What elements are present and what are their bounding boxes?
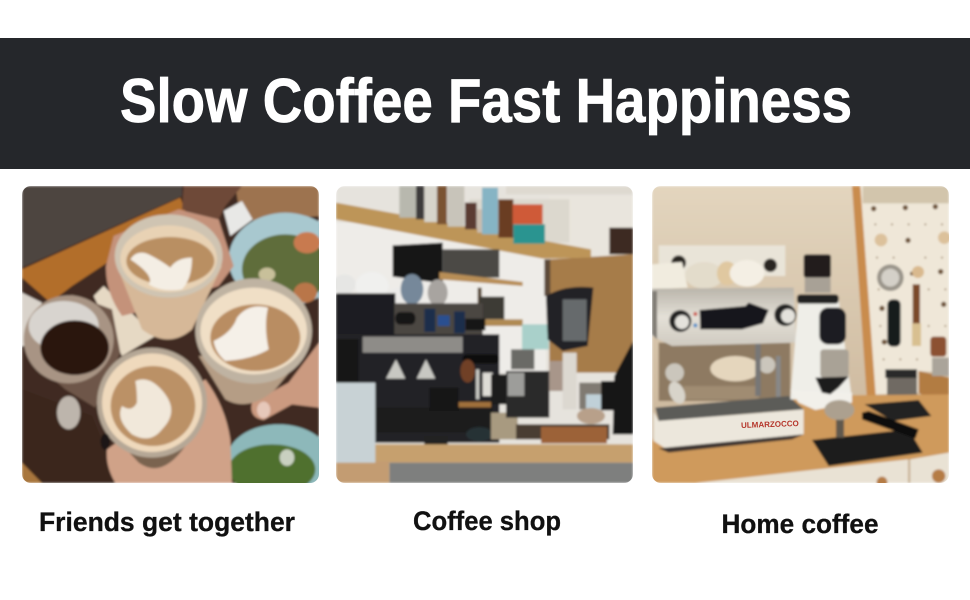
- caption: home coffee: Home coffee: [722, 509, 878, 539]
- espresso machine: [652, 288, 804, 453]
- top shelf: [336, 186, 591, 259]
- cup: latte right: [195, 278, 312, 404]
- wood panel: [549, 254, 633, 373]
- counter: [652, 394, 949, 487]
- tamping station: [812, 400, 931, 466]
- cup: latte bottom: [97, 348, 207, 468]
- cup: latte top: [115, 214, 223, 339]
- panel: coffee shop photo: [333, 186, 633, 483]
- panel: home coffee photo: [652, 186, 951, 487]
- glass: [336, 383, 375, 463]
- grinder: [790, 254, 852, 410]
- thumb nail: [257, 402, 270, 418]
- cups: [652, 260, 764, 289]
- hands: [106, 186, 319, 483]
- caption: friends: Friends get together: [39, 507, 295, 537]
- cup: espresso: [24, 294, 120, 408]
- panel: friends photo: [22, 186, 319, 483]
- monitor and cans: [393, 243, 523, 326]
- nail polish: [101, 433, 110, 450]
- basket: [609, 228, 633, 254]
- title banner: [0, 38, 970, 169]
- pegboard: [852, 186, 951, 413]
- outlets: [659, 245, 785, 276]
- espresso machine: [336, 293, 499, 446]
- counter: [336, 444, 633, 483]
- machine brand: ULMARZOCCO: [741, 419, 799, 430]
- title: Slow Coffee Fast Happiness: [120, 67, 852, 136]
- caption: coffee shop: Coffee shop: [413, 506, 561, 536]
- cups on machine: [333, 272, 448, 306]
- grinder and jugs: [491, 287, 633, 443]
- plate: salad bottom right: [229, 422, 319, 483]
- plate: salad top right: [228, 210, 319, 305]
